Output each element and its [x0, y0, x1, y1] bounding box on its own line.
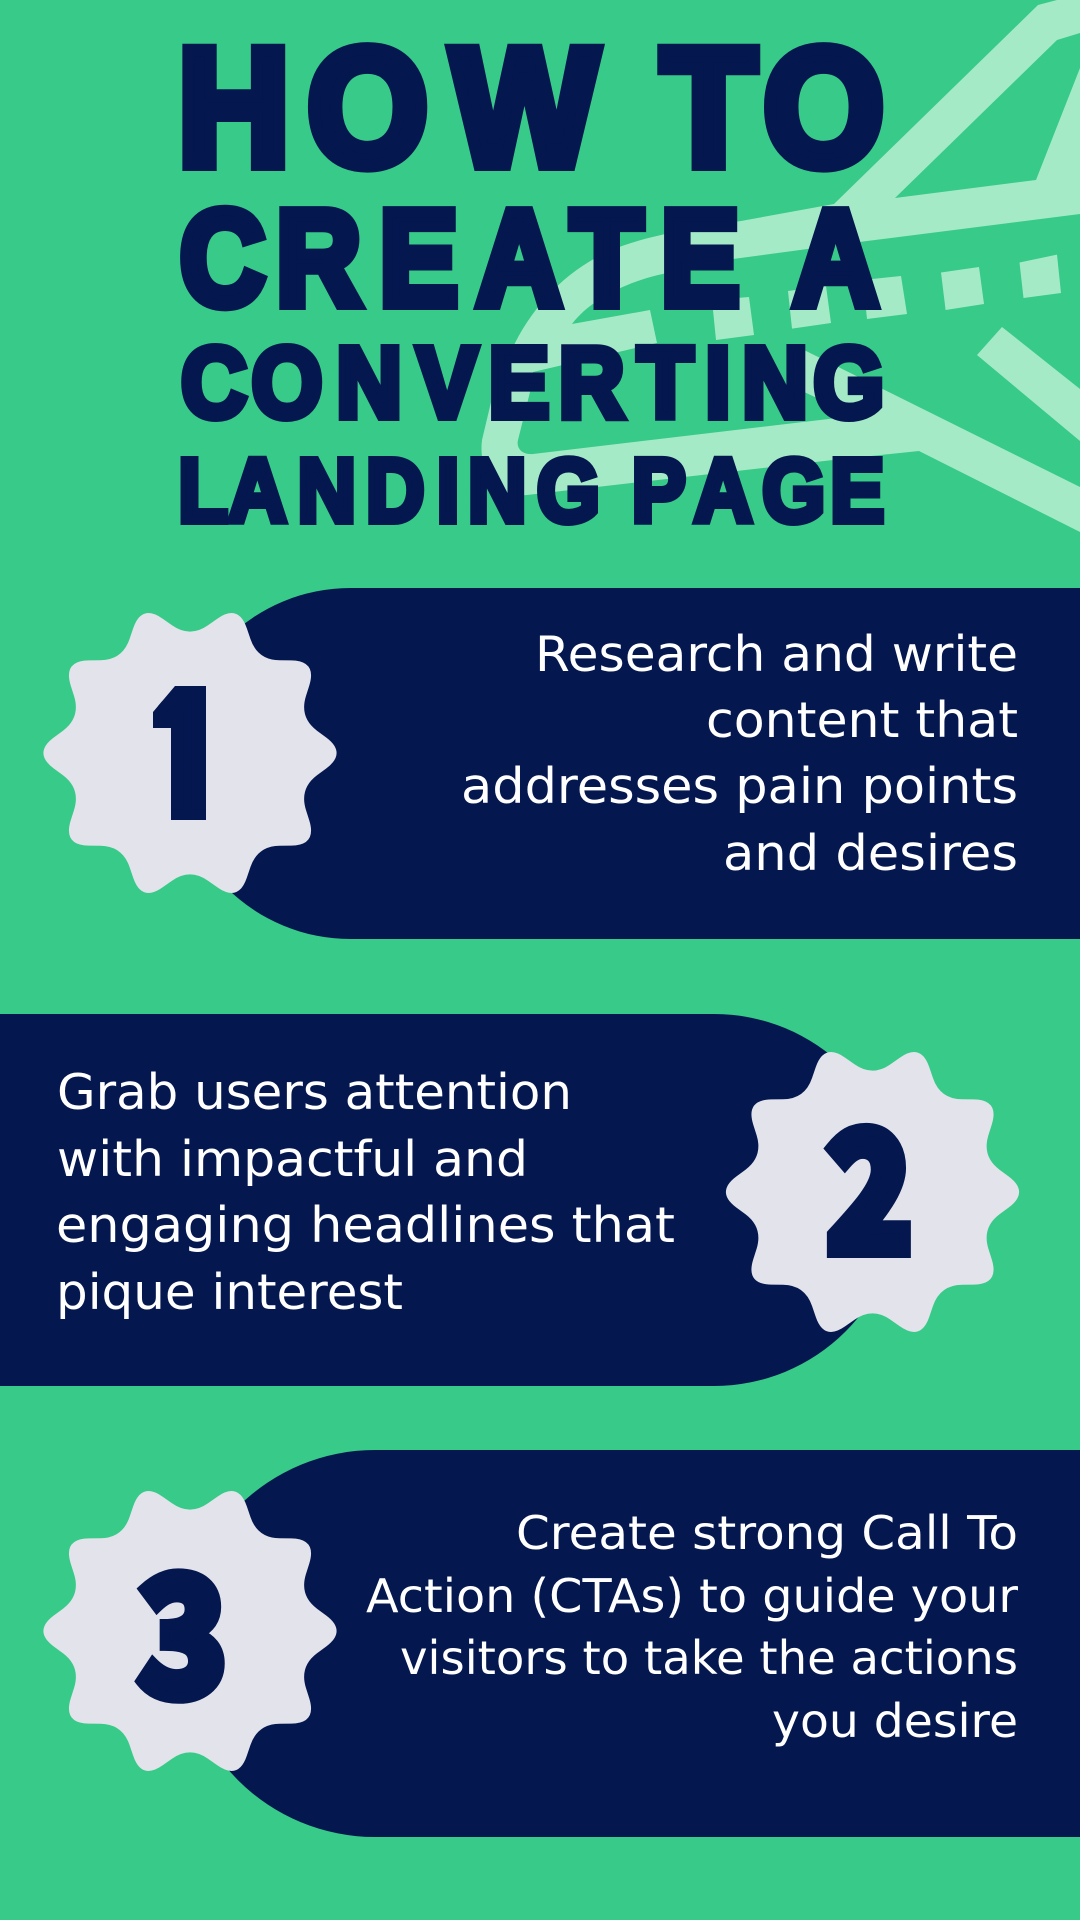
step 3 text: visitors to take the actions	[400, 1631, 1018, 1685]
step 2 text	[56, 1064, 675, 1321]
step 1 text: content that	[706, 692, 1018, 749]
step 1 text: Research and write	[535, 626, 1018, 683]
title line: HOW TO: HOW TO	[178, 14, 884, 200]
step 3 text	[366, 1506, 1018, 1748]
title line: CREATE A: CREATE A	[180, 182, 878, 333]
panel background	[175, 588, 1080, 939]
step 3 text: Action (CTAs) to guide your	[366, 1569, 1018, 1623]
panel: step 2	[0, 1014, 1019, 1386]
badge: number 3	[43, 1491, 337, 1771]
icon: paper plane outline	[481, 0, 1080, 532]
panel: step 3	[43, 1450, 1080, 1837]
number 1: 1	[145, 609, 225, 879]
step 3 text: Create strong Call To	[516, 1506, 1018, 1560]
panel background	[0, 1014, 900, 1386]
step 2 text: Grab users attention	[57, 1064, 572, 1121]
panel background	[182, 1450, 1080, 1837]
badge: number 1	[43, 609, 337, 893]
title line: LANDING PAGE: LANDING PAGE	[178, 441, 884, 541]
number 3: 3	[137, 1505, 228, 1744]
step 1 text: addresses pain points	[461, 758, 1018, 815]
badge shape	[43, 613, 337, 893]
step 2 text: engaging headlines that	[56, 1197, 675, 1254]
step 2 text: pique interest	[56, 1264, 403, 1321]
badge: number 2	[726, 1052, 1019, 1332]
badge shape	[43, 1491, 337, 1771]
number 2: 2	[826, 1060, 912, 1300]
badge shape	[726, 1052, 1019, 1332]
step 1 text: and desires	[723, 825, 1018, 882]
title line: CONVERTING: CONVERTING	[181, 327, 884, 439]
title	[178, 14, 884, 541]
step 2 text: with impactful and	[57, 1131, 528, 1188]
panel: step 1	[43, 588, 1080, 939]
step 1 text	[461, 626, 1018, 882]
step 3 text: you desire	[772, 1694, 1018, 1748]
